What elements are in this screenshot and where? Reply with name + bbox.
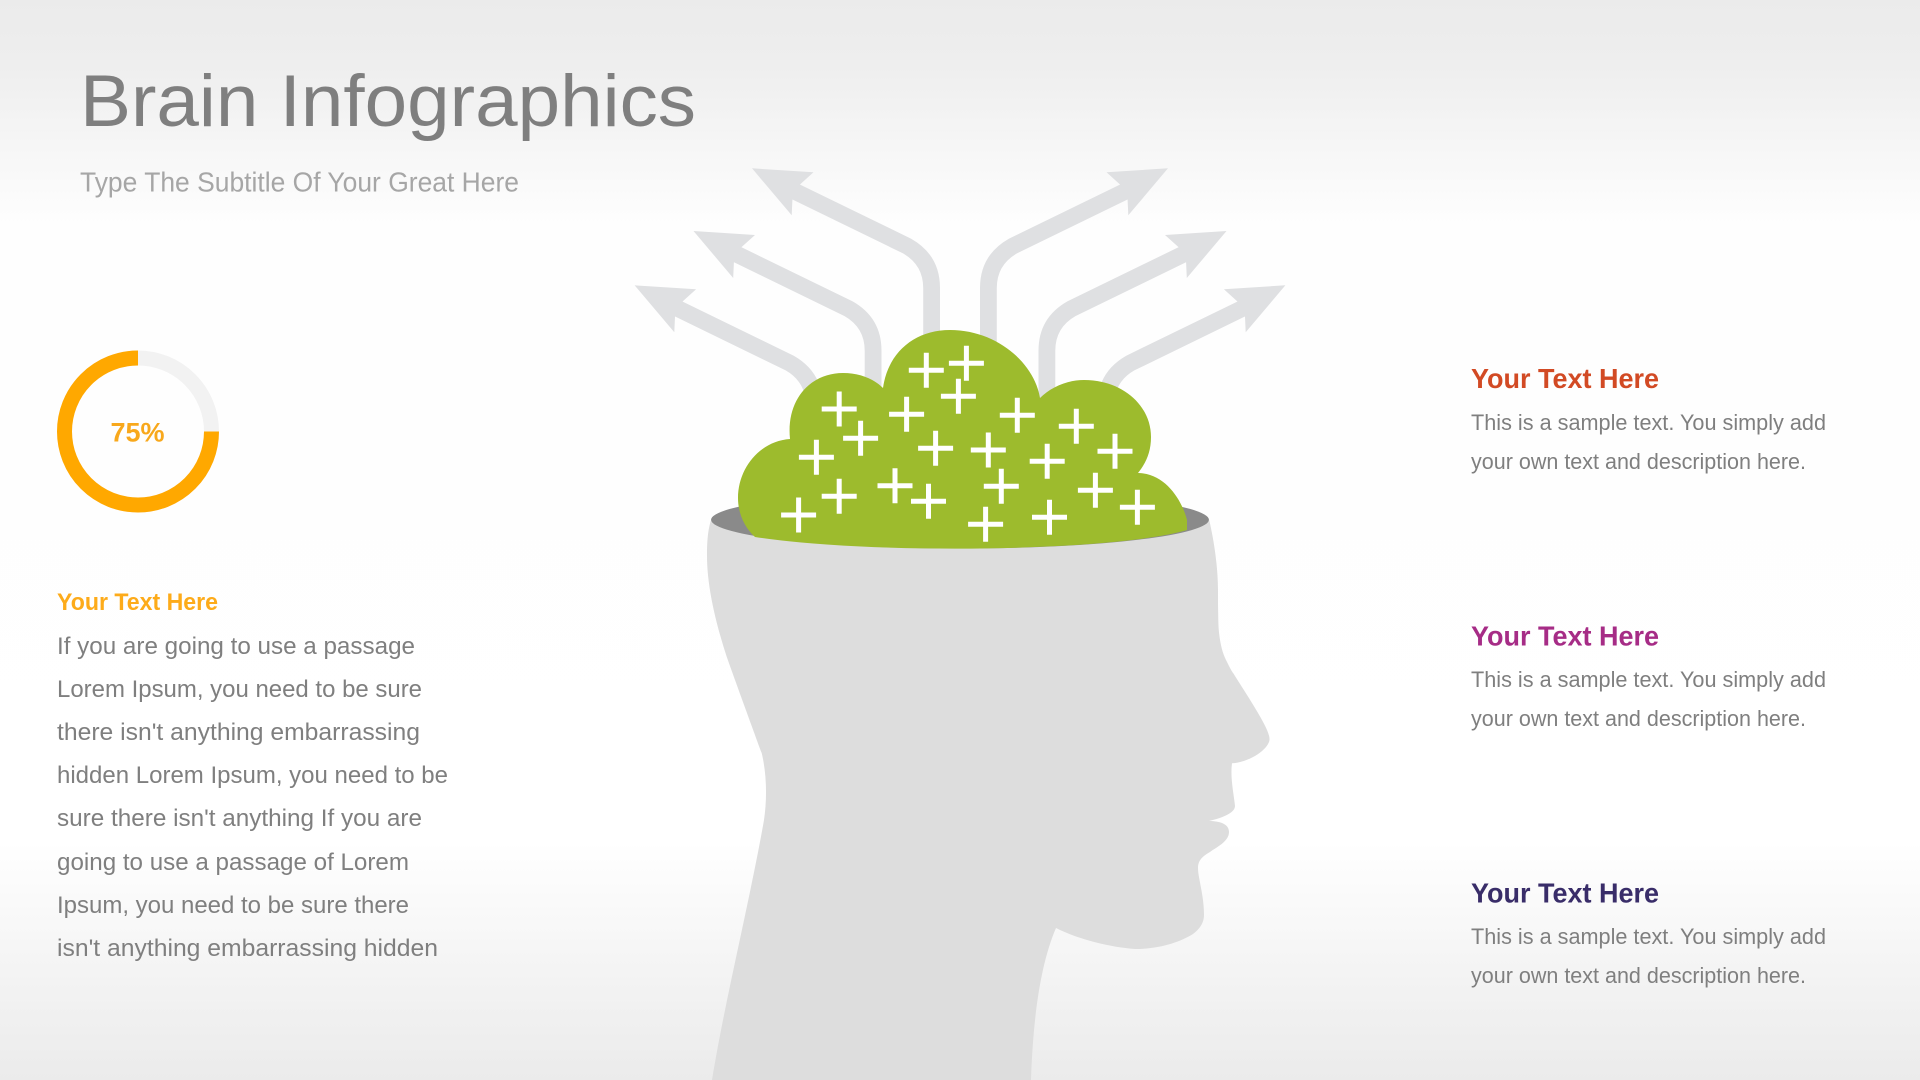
head opening xyxy=(711,491,1209,549)
left text block: hidden Lorem Ipsum, you need to be xyxy=(57,762,448,789)
right text block 3: Your Text Here xyxy=(1471,878,1659,908)
right text block 2: Your Text Here xyxy=(1471,620,1659,652)
right text block 2 xyxy=(1471,620,1826,731)
right text block 1: Your Text Here xyxy=(1471,363,1659,394)
left text block: sure there isn't anything If you are xyxy=(57,805,422,832)
arrow: top right xyxy=(988,168,1168,400)
right text block 3: your own text and description here. xyxy=(1471,963,1806,988)
arrow: middle right xyxy=(1047,231,1226,463)
brain shape xyxy=(738,330,1187,549)
brain plus marks xyxy=(781,346,1155,542)
left text block: Ipsum, you need to be sure there xyxy=(57,892,409,919)
left text block: Lorem Ipsum, you need to be sure xyxy=(57,676,422,703)
arrow: top left xyxy=(752,168,932,400)
right text block 2: This is a sample text. You simply add xyxy=(1471,667,1826,692)
left text block: going to use a passage of Lorem xyxy=(57,849,409,876)
left text block: If you are going to use a passage xyxy=(57,633,415,660)
left text block: Your Text Here xyxy=(57,589,218,616)
right text block 1 xyxy=(1471,363,1826,474)
arrow: lower right xyxy=(1106,285,1285,517)
arrow: middle left xyxy=(694,231,873,463)
arrow: lower left xyxy=(635,285,814,517)
left text block xyxy=(57,589,448,962)
right text block 2: your own text and description here. xyxy=(1471,706,1806,731)
title: Brain Infographics xyxy=(80,61,696,142)
brain xyxy=(738,330,1187,549)
head silhouette xyxy=(707,519,1270,1080)
donut chart: 75%: 75% xyxy=(110,418,165,448)
subtitle: Type The Subtitle Of Your Great Here xyxy=(80,166,519,198)
right text block 3: This is a sample text. You simply add xyxy=(1471,924,1826,949)
left text block: isn't anything embarrassing hidden xyxy=(57,935,438,962)
left text block: there isn't anything embarrassing xyxy=(57,719,420,746)
arrows fanning out of the head xyxy=(635,168,1285,517)
right text block 1: This is a sample text. You simply add xyxy=(1471,410,1826,435)
right text block 1: your own text and description here. xyxy=(1471,449,1806,474)
donut chart: 75% xyxy=(64,358,212,505)
right text block 3 xyxy=(1471,878,1826,988)
